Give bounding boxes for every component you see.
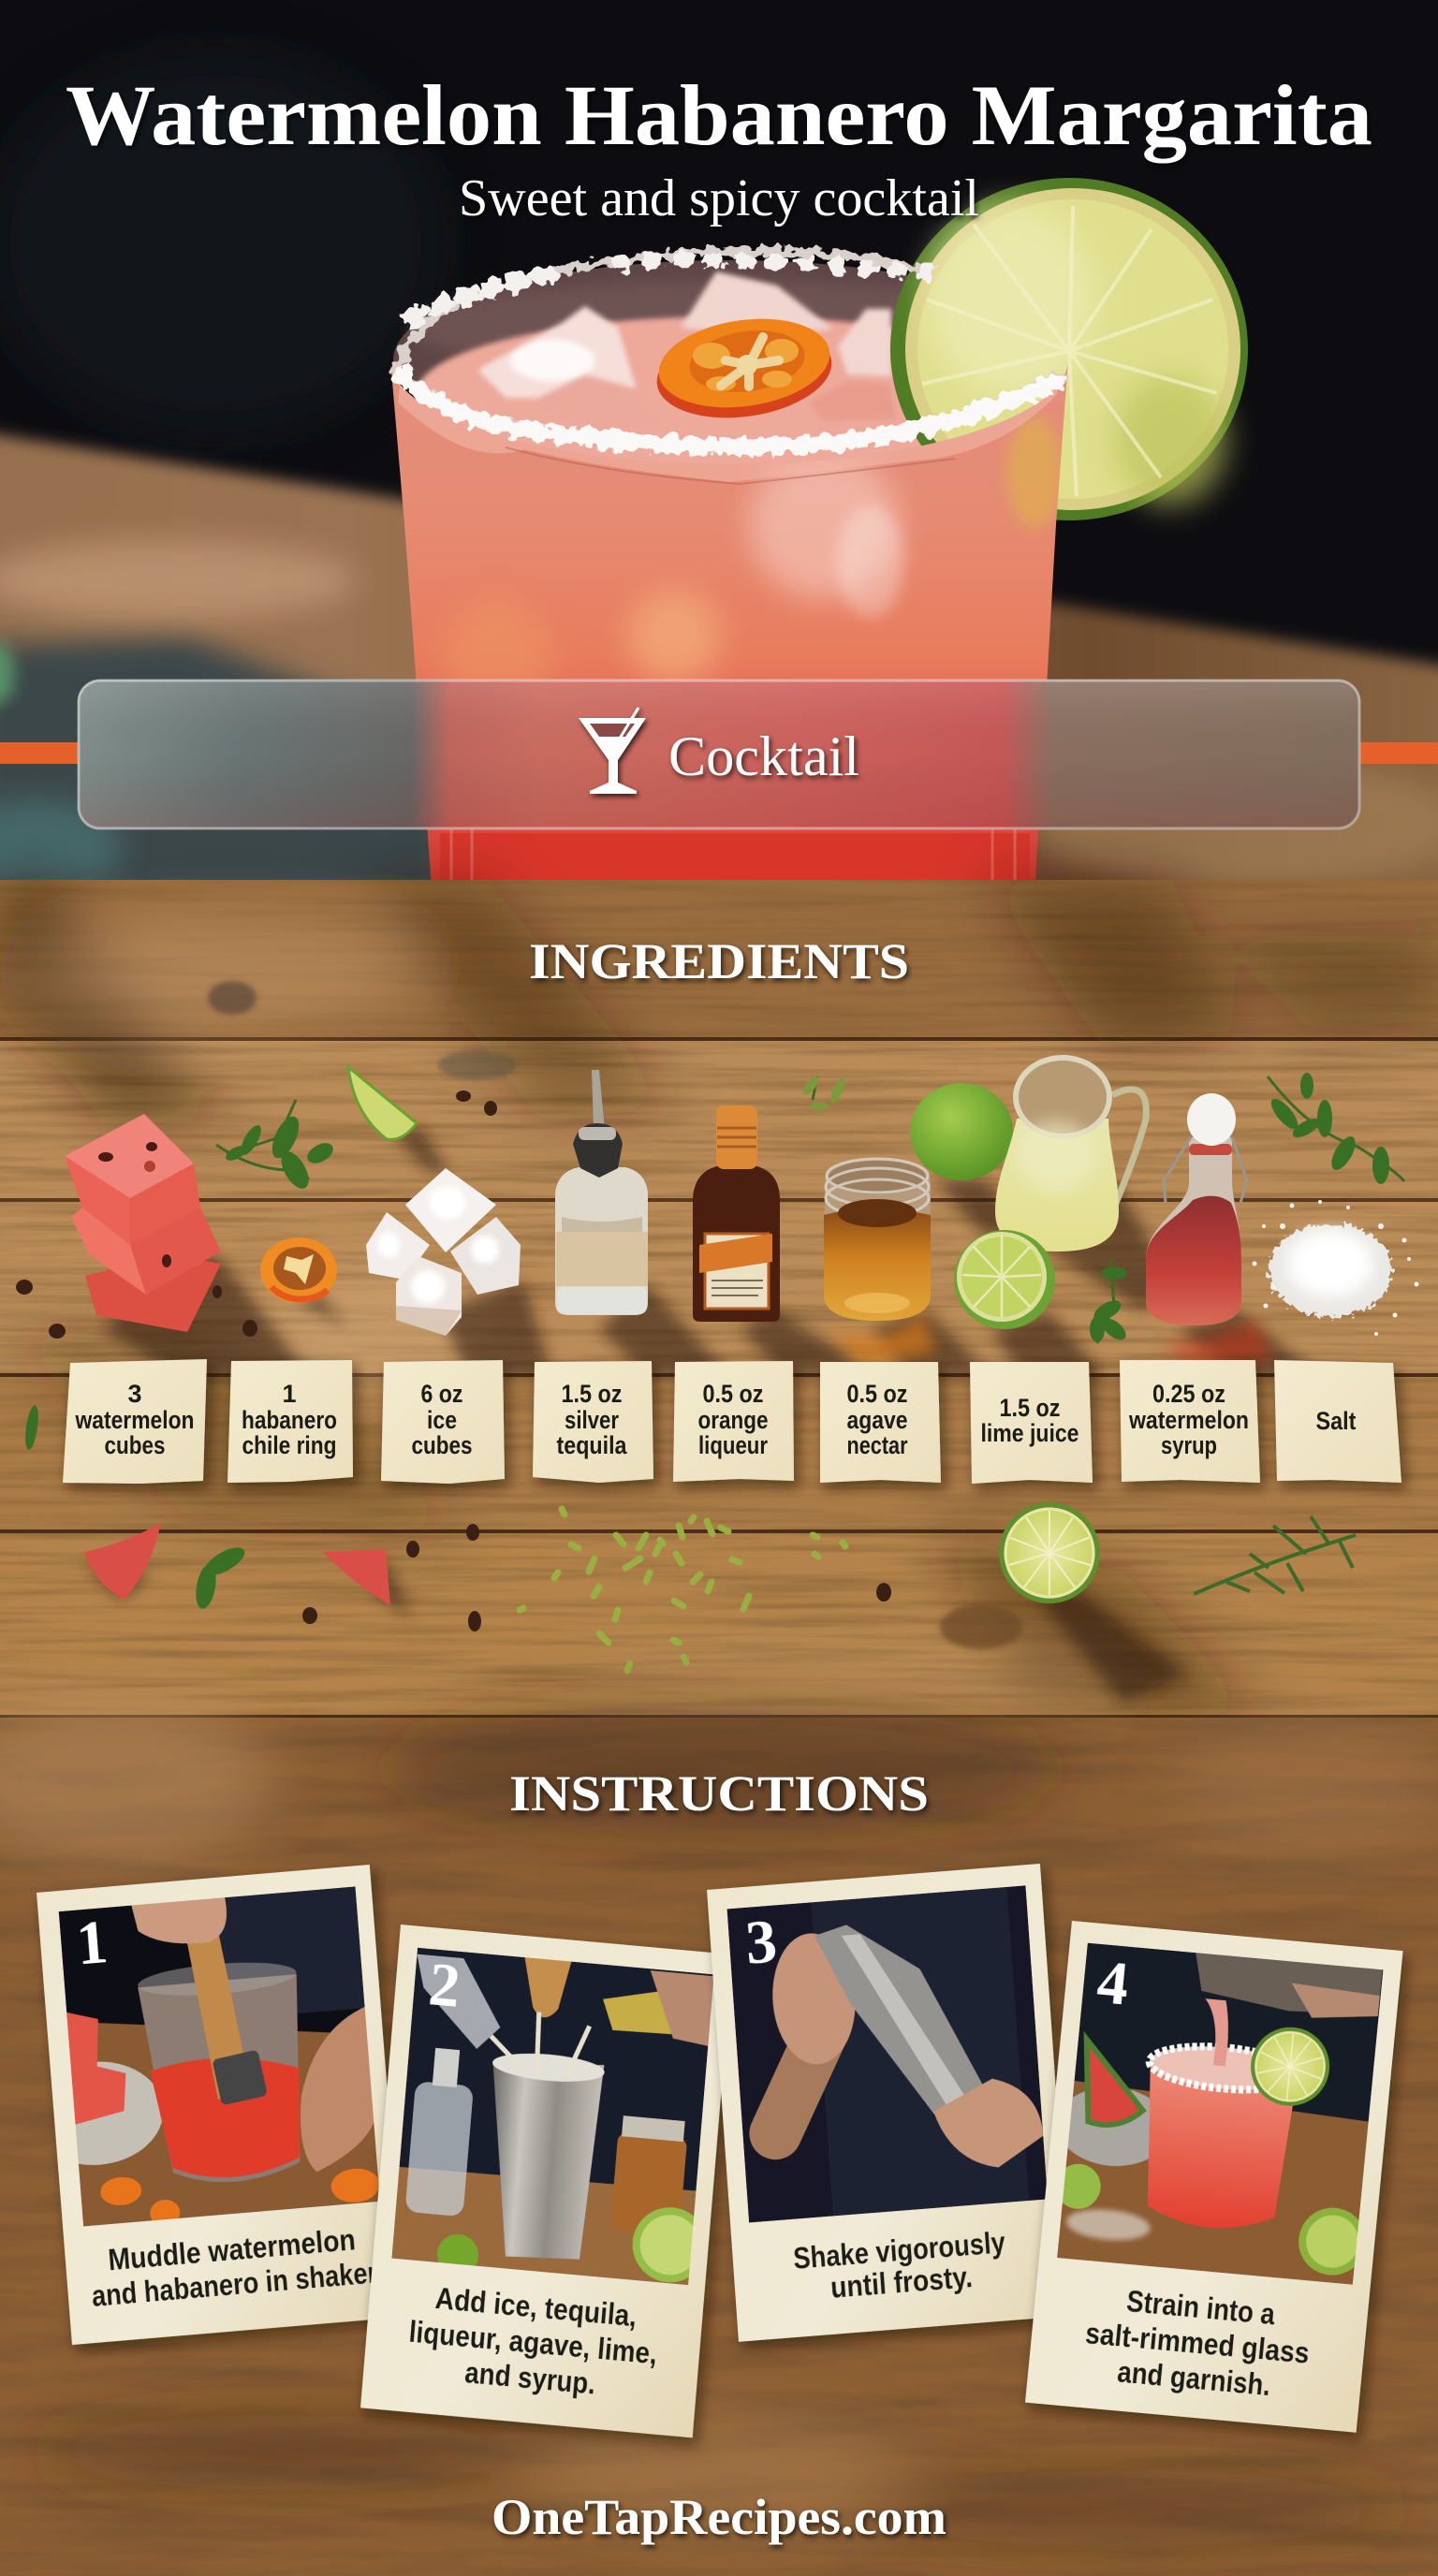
ingredient shadows [84, 1128, 1320, 1704]
label: 0.5 oz orange liqueur: orange [698, 1406, 768, 1434]
step card 4 [1025, 1921, 1403, 2433]
step text 3: until frosty. [829, 2260, 974, 2305]
label: 1.5 oz silver tequila: tequila [556, 1431, 627, 1459]
garnish: lime wedge [348, 1067, 417, 1139]
step number 3: 3 [743, 1907, 779, 1978]
label: 0.25 oz watermelon syrup: watermelon [1128, 1406, 1249, 1434]
step card 1 [11, 1865, 405, 2347]
footer website: OneTapRecipes.com [492, 2489, 946, 2545]
label: 0.5 oz agave nectar: agave [846, 1406, 908, 1434]
step text 2: and syrup. [463, 2355, 596, 2401]
label: 1 habanero chile ring: habanero [242, 1406, 337, 1434]
ingredient: salt pile [1253, 1200, 1419, 1336]
ingredient: watermelon cubes [65, 1114, 221, 1332]
label: 6 oz ice cubes: cubes [412, 1431, 472, 1459]
label: 6 oz ice cubes: ice [427, 1406, 457, 1434]
label: 0.25 oz watermelon syrup: 0.25 oz [1152, 1380, 1225, 1408]
salt rim [398, 251, 1056, 447]
banner label: Cocktail [668, 725, 859, 787]
label: 3 watermelon cubes [63, 1359, 207, 1484]
glass with drink [390, 178, 1248, 899]
step text 4: Strain into a [1125, 2284, 1277, 2331]
garnish: herbs and lime [23, 1073, 1404, 1610]
ingredient: agave nectar jar [824, 1159, 936, 1367]
label: 3 watermelon cubes: 3 [127, 1380, 142, 1408]
label: 1 habanero chile ring [227, 1360, 353, 1483]
label: 3 watermelon cubes: cubes [105, 1431, 165, 1459]
label: 1.5 oz silver tequila: 1.5 oz [562, 1380, 622, 1408]
step text 1 [88, 2220, 378, 2313]
garnish: watermelon wedges [84, 1523, 390, 1605]
ingredient: silver tequila bottle [555, 1070, 648, 1315]
garnish: lime zest [520, 1509, 845, 1671]
step card 2 [360, 1925, 733, 2437]
step text 1: and habanero in shaker [91, 2255, 378, 2313]
title: Watermelon Habanero Margarita [66, 67, 1372, 163]
icon: martini glass [579, 708, 646, 794]
photo: pouring ingredients [390, 1948, 730, 2298]
label: salt: Salt [1316, 1407, 1356, 1435]
label: 1.5 oz lime juice: lime juice [981, 1419, 1078, 1447]
step text 1: Muddle watermelon [107, 2222, 357, 2276]
step card 3 [707, 1864, 1072, 2342]
ingredient: watermelon syrup bottle [1146, 1093, 1273, 1374]
ingredient: whole lime [910, 1083, 1013, 1180]
table in hero [0, 431, 1438, 908]
step text 3: Shake vigorously [792, 2225, 1006, 2276]
wood planks [0, 880, 1438, 1718]
label: 0.5 oz orange liqueur: liqueur [698, 1431, 768, 1459]
step text 3 [792, 2225, 1009, 2307]
step number 1: 1 [74, 1908, 110, 1979]
category banner [78, 680, 1360, 829]
label: 0.5 oz orange liqueur [673, 1361, 794, 1482]
label: 0.25 oz watermelon syrup [1120, 1360, 1260, 1483]
label: 6 oz ice cubes [381, 1360, 505, 1484]
label: 1.5 oz silver tequila: silver [565, 1406, 619, 1434]
step text 4: and garnish. [1116, 2354, 1272, 2402]
step text 2: liqueur, agave, lime, [407, 2315, 658, 2370]
ingredient: orange liqueur bottle [693, 1105, 780, 1322]
step number 2: 2 [426, 1950, 462, 2021]
photo: muddling [13, 1886, 383, 2237]
ingredient labels [63, 1359, 1401, 1484]
label: 3 watermelon cubes: watermelon [75, 1406, 195, 1434]
orange stripe right [1359, 742, 1438, 764]
step text 2: Add ice, tequila, [434, 2281, 638, 2333]
photo: shaking [726, 1885, 1048, 2223]
step text 2 [404, 2279, 662, 2406]
ingredient: lime juice pitcher [995, 1058, 1146, 1251]
wood background [0, 1694, 1438, 2576]
panel: instructions [0, 1694, 1438, 2576]
label: 0.5 oz orange liqueur: 0.5 oz [702, 1380, 764, 1408]
step text 4: salt-rimmed glass [1084, 2316, 1311, 2370]
heading: instructions: INSTRUCTIONS [509, 1765, 929, 1822]
lime garnish [890, 178, 1248, 520]
subtitle: Sweet and spicy cocktail [459, 169, 979, 227]
ingredient: lime half [954, 1230, 1055, 1329]
label: 6 oz ice cubes: 6 oz [421, 1380, 462, 1408]
ingredient: ice cubes [366, 1168, 521, 1336]
label: 1.5 oz lime juice [970, 1362, 1093, 1484]
pepper garnish [657, 318, 831, 417]
label: 1.5 oz silver tequila [533, 1361, 653, 1483]
label: 0.5 oz agave nectar [820, 1362, 941, 1483]
glass body [390, 359, 1068, 899]
step text 4 [1080, 2280, 1314, 2406]
ingredient: habanero ring [260, 1237, 337, 1303]
panel: hero photo [0, 0, 1438, 908]
label: 0.5 oz agave nectar: nectar [846, 1431, 908, 1459]
label: 1 habanero chile ring: chile ring [242, 1431, 337, 1459]
label: 0.5 oz agave nectar: 0.5 oz [846, 1380, 908, 1408]
panel: ingredients [0, 880, 1438, 1718]
orange stripe left [0, 742, 79, 764]
step number 4: 4 [1094, 1948, 1132, 2019]
label: 1 habanero chile ring: 1 [282, 1380, 297, 1408]
heading: ingredients: INGREDIENTS [529, 933, 909, 989]
label: salt [1274, 1360, 1401, 1483]
wood knots [208, 981, 1022, 1649]
photo: strain and garnish [1044, 1941, 1392, 2286]
label: 1.5 oz lime juice: 1.5 oz [1000, 1394, 1060, 1422]
label: 0.25 oz watermelon syrup: syrup [1161, 1431, 1217, 1459]
garnish: peppercorns [16, 1090, 891, 1632]
